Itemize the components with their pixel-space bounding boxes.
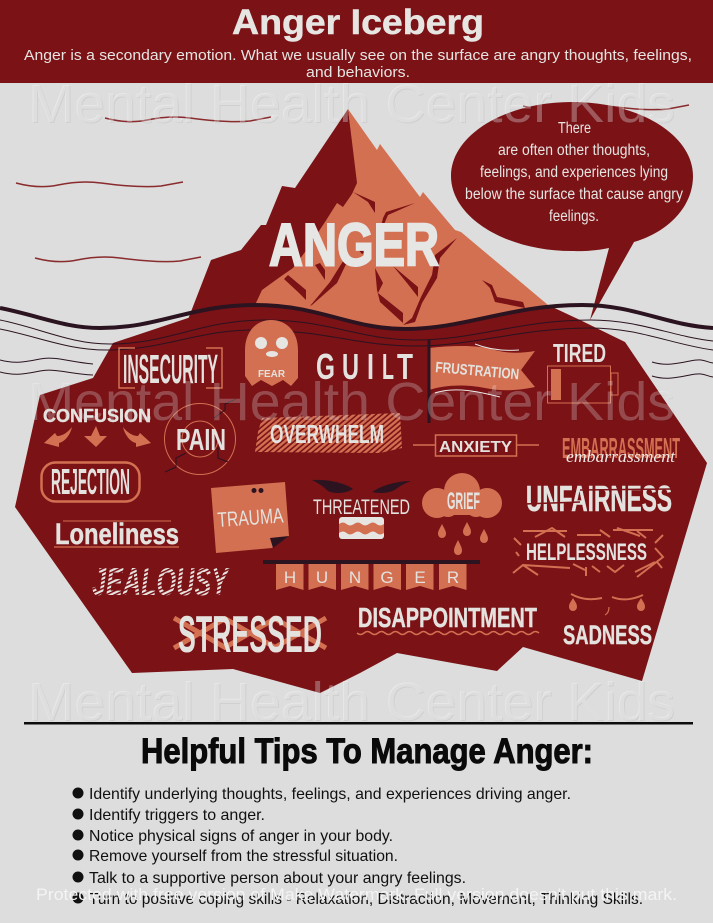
ANGER label: ANGER: [269, 212, 439, 278]
bubble text: There: [558, 120, 591, 137]
watermark text: Mental Health Center Kids: [29, 373, 676, 433]
TRAUMA sticky note: [211, 482, 289, 553]
INSECURITY: [119, 346, 222, 392]
iceberg tip mountain: [187, 109, 560, 335]
header banner: [0, 0, 713, 83]
TIRED battery: TIRED: [553, 338, 606, 368]
GUILT: T: [397, 346, 413, 387]
text: INSECURITY: [123, 346, 218, 392]
intro text: Anger is a secondary emotion. What we usually see on the surface are angry thoughts, feelings,: [24, 48, 692, 64]
TRAUMA sticky note: TRAUMA: [217, 504, 284, 532]
bubble text: are often other thoughts,: [498, 142, 650, 159]
GUILT: G: [316, 346, 335, 387]
intro text: and behaviors.: [306, 65, 410, 81]
tips list: Identify triggers to anger.: [89, 807, 265, 824]
SADNESS face: SADNESS: [563, 620, 652, 650]
FRUSTRATION flag: FRUSTRATION: [435, 359, 520, 383]
PAIN circles: PAIN: [176, 422, 226, 457]
protection notice: Protected with free version of Make Watermark. Full version doesn't put this mark.: [36, 886, 677, 904]
GRIEF cloud: [422, 473, 502, 555]
ANXIETY box: ANXIETY: [439, 439, 513, 456]
surface wave lines: [16, 105, 689, 262]
GRIEF cloud: GRIEF: [447, 488, 480, 515]
bubble text: feelings.: [549, 208, 599, 225]
divider: [24, 722, 693, 724]
HUNGER bunting: U: [316, 568, 328, 587]
watermark text: Mental Health Center Kids: [29, 673, 676, 733]
tips heading: Helpful Tips To Manage Anger:: [141, 732, 593, 771]
thin water lines: [0, 320, 713, 378]
title: Anger Iceberg: [232, 3, 484, 42]
OVERWHELM scribble: OVERWHELM: [270, 419, 384, 449]
Loneliness: Loneliness: [55, 518, 179, 551]
intro text: [24, 48, 692, 81]
mountain cracks: [284, 192, 525, 325]
HUNGER bunting: N: [349, 568, 361, 587]
GUILT: I: [367, 346, 374, 387]
GUILT: L: [382, 346, 394, 387]
watermark text: Mental Health Center Kids: [28, 672, 675, 732]
HUNGER bunting: R: [447, 568, 459, 587]
PAIN circles: [164, 399, 236, 474]
text: REJECTION: [51, 461, 130, 502]
FEAR ghost: [245, 320, 298, 386]
HUNGER bunting: [263, 560, 480, 590]
speech bubble: [451, 102, 693, 320]
tips list: Identify underlying thoughts, feelings, and experiences driving anger.: [89, 786, 571, 803]
watermark text: Mental Health Center Kids: [28, 74, 675, 134]
tips list: [72, 786, 643, 908]
watermark text: [28, 74, 676, 733]
GUILT: [316, 346, 413, 387]
CONFUSION with arrows: [43, 406, 151, 447]
tips list: Remove yourself from the stressful situation.: [89, 848, 398, 865]
OVERWHELM scribble: [255, 413, 402, 453]
tips list: Turn to positive coping skills - Relaxation, Distraction, Movement, Thinking Skills.: [89, 891, 643, 908]
STRESSED: STRESSED: [178, 606, 322, 664]
GUILT: U: [342, 346, 359, 387]
THREATENED face: [312, 480, 411, 539]
bubble text: below the surface that cause angry: [465, 186, 683, 203]
EMBARRASSMENT: embarrassment: [566, 447, 676, 466]
CONFUSION with arrows: CONFUSION: [43, 406, 151, 426]
TIRED battery: [548, 338, 618, 403]
HUNGER bunting: H: [284, 568, 296, 587]
HUNGER bunting: G: [380, 568, 394, 587]
ANXIETY box: [413, 435, 539, 456]
watermark text: Mental Health Center Kids: [29, 75, 676, 135]
watermark text: Mental Health Center Kids: [28, 372, 675, 432]
mountain dark shadow side: [187, 109, 360, 330]
SADNESS face: [563, 594, 652, 650]
iceberg underwater body: [15, 305, 707, 693]
STRESSED: [174, 606, 326, 664]
bubble text: feelings, and experiences lying: [480, 164, 668, 181]
HELPLESSNESS: [513, 528, 663, 577]
tips list: Talk to a supportive person about your angry feelings.: [89, 870, 466, 887]
FEAR ghost: FEAR: [258, 368, 285, 380]
FRUSTRATION flag: [429, 340, 535, 423]
JEALOUSY: JEALOUSY: [92, 561, 230, 604]
HUNGER bunting: E: [414, 568, 426, 587]
REJECTION pill: [42, 461, 140, 502]
mountain light side: [245, 109, 560, 335]
DISAPPOINTMENT: DISAPPOINTMENT: [358, 602, 537, 633]
thick water line: [0, 305, 713, 329]
bubble text: [465, 120, 683, 225]
tips list: Notice physical signs of anger in your body.: [89, 828, 393, 845]
THREATENED face: THREATENED: [313, 496, 410, 519]
